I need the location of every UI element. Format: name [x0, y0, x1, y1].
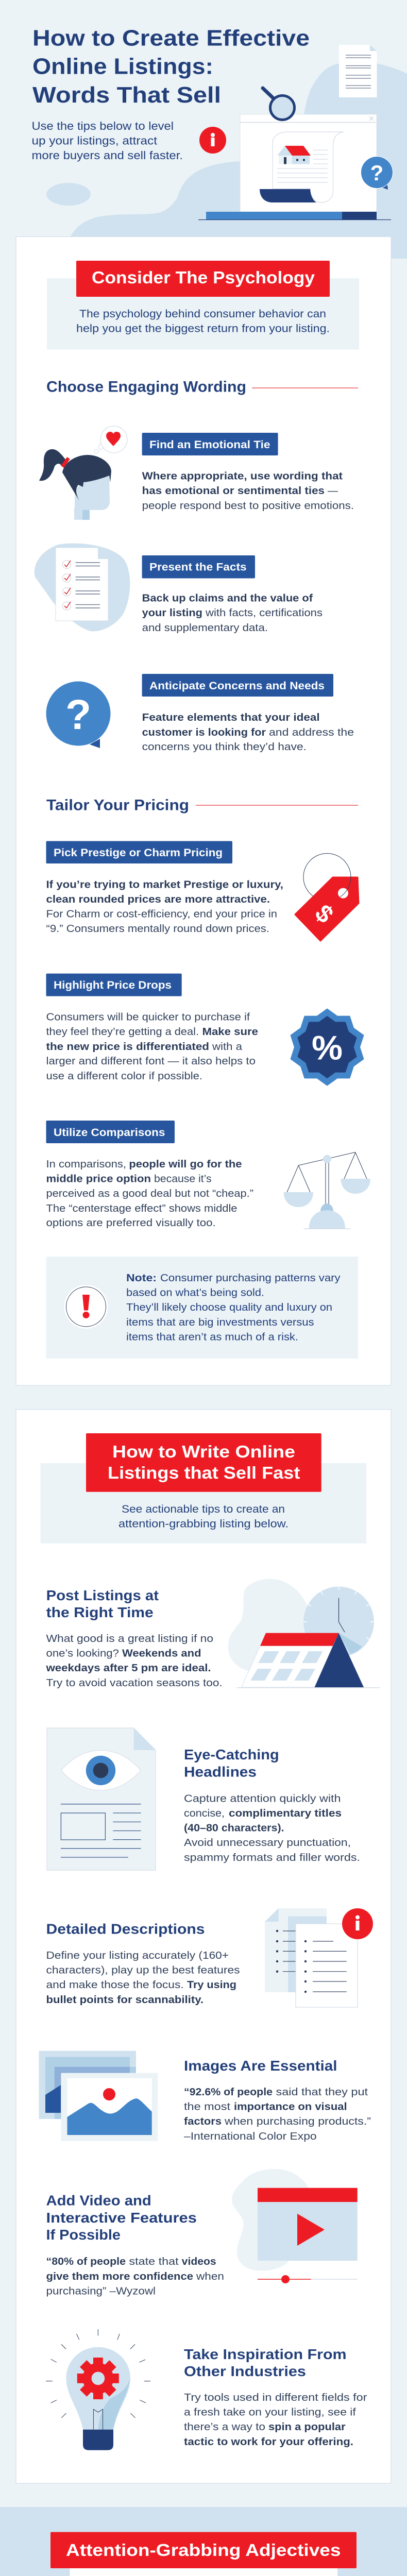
intro text: up your listings, attract — [32, 134, 157, 147]
block: images are essential: said that they put — [276, 2086, 368, 2098]
block: find an emotional tie: people respond best to positive emotions. — [142, 500, 354, 512]
block: add video and interactive features: when — [196, 2270, 224, 2282]
block: highlight price drops — [46, 974, 258, 1082]
icon: exclamation circle — [64, 1285, 108, 1329]
block: add video and interactive features: purchasing” –Wyzowl — [46, 2285, 156, 2297]
icon: stacked bullet documents — [265, 1908, 373, 2007]
heading banner: attention-grabbing adjectives: Attention-Grabbing Adjectives — [66, 2540, 341, 2560]
block: take inspiration from other industries: Try tools used in different fields for — [184, 2392, 367, 2403]
block: take inspiration from other industries: tactic to work for your offering. — [184, 2436, 353, 2448]
block: anticipate concerns and needs — [142, 674, 354, 753]
block: anticipate concerns and needs: concerns you think they’d have. — [142, 741, 307, 753]
heading banner: consider the psychology: Consider The Psychology — [92, 268, 315, 287]
block: highlight price drops: the new price is differentiated — [46, 1041, 209, 1053]
block: detailed descriptions: Try using — [187, 1979, 236, 1991]
block: add video and interactive features: Add Video and — [46, 2193, 151, 2209]
heading: tailor your pricing: Tailor Your Pricing — [46, 796, 189, 814]
block: anticipate concerns and needs: customer is looking for — [142, 726, 266, 738]
intro box: See actionable tips to create an — [122, 1503, 285, 1515]
heading banner: attention-grabbing adjectives — [50, 2532, 357, 2568]
block: eye-catching headlines: complimentary titles — [229, 1807, 342, 1819]
intro text: more buyers and sell faster. — [32, 149, 183, 162]
intro box: attention-grabbing listing below. — [118, 1518, 289, 1530]
title: Online Listings: — [32, 54, 213, 79]
heading banner: how to write online listings — [86, 1433, 321, 1492]
title: How to Create Effective — [32, 26, 310, 51]
section: attention-grabbing adjectives — [0, 2507, 407, 2576]
block: take inspiration from other industries: Take Inspiration From — [184, 2346, 347, 2362]
block: eye-catching headlines — [184, 1747, 360, 1863]
icon: document — [339, 45, 377, 97]
block: highlight price drops: with a — [212, 1041, 243, 1053]
block: detailed descriptions: Define your listing accurately (160+ — [46, 1950, 229, 1961]
block: add video and interactive features: videos — [182, 2256, 216, 2267]
block: find an emotional tie: Where appropriate, use wording that — [142, 470, 343, 482]
block: highlight price drops: Consumers will be quicker to purchase if — [46, 1011, 250, 1023]
block: utilize comparisons — [46, 1121, 253, 1229]
icon: question bubble — [361, 157, 393, 190]
icon: checklist document — [35, 544, 130, 631]
block: utilize comparisons: because it’s — [154, 1173, 212, 1185]
block: present the facts: Present the Facts — [149, 562, 247, 573]
icon: price tag — [295, 853, 359, 941]
block: take inspiration from other industries: a fresh take on your listing, see if — [184, 2406, 356, 2418]
block: pick prestige or charm pricing: “9.” Consumers mentally round down prices. — [46, 923, 269, 935]
icon: video player — [232, 2169, 358, 2283]
block: eye-catching headlines: concise, — [184, 1807, 225, 1819]
block: images are essential: “92.6% of people — [184, 2086, 273, 2098]
block: utilize comparisons: Utilize Comparisons — [54, 1127, 165, 1139]
block: find an emotional tie: Find an Emotional Tie — [149, 439, 270, 451]
icon: balance scale — [284, 1152, 370, 1229]
callout: note: Consumer purchasing patterns vary — [160, 1272, 341, 1284]
block: highlight price drops: they feel they’re getting a deal. — [46, 1026, 199, 1038]
title — [32, 26, 310, 108]
heading banner: consider the psychology — [76, 261, 330, 297]
intro box: help you get the biggest return from your listing. — [76, 323, 330, 335]
icon: magnifying glass — [263, 88, 295, 120]
block: add video and interactive features: Interactive Features — [46, 2210, 197, 2226]
block: post listings at the right time: Weekends and — [122, 1648, 201, 1659]
block: post listings at the right time: Post Listings at — [46, 1587, 159, 1603]
intro box — [41, 1463, 366, 1544]
block: eye-catching headlines: Headlines — [184, 1764, 257, 1780]
block: utilize comparisons: perceived as a good deal but not “cheap.” — [46, 1188, 253, 1199]
block: anticipate concerns and needs: and address the — [269, 726, 354, 738]
block: take inspiration from other industries: spin a popular — [268, 2421, 346, 2433]
block: add video and interactive features — [46, 2193, 224, 2297]
block: pick prestige or charm pricing: clean rounded prices are more attractive. — [46, 893, 270, 905]
block: detailed descriptions: bullet points for scannability. — [46, 1994, 204, 2006]
callout: note: based on what’s being sold. — [126, 1287, 264, 1299]
icon: percent badge — [291, 1009, 363, 1085]
block: pick prestige or charm pricing: For Charm or cost-efficiency, end your price in — [46, 908, 277, 920]
block: utilize comparisons: In comparisons, — [46, 1158, 126, 1170]
title: Words That Sell — [32, 82, 221, 108]
icon: red info circle — [199, 127, 226, 154]
block: find an emotional tie — [142, 433, 354, 512]
block: eye-catching headlines: Avoid unnecessary punctuation, — [184, 1837, 351, 1849]
heading: choose engaging wording: Choose Engaging Wording — [46, 379, 246, 396]
block: highlight price drops: larger and different font — it also helps to — [46, 1055, 256, 1067]
block: take inspiration from other industries — [184, 2346, 367, 2448]
block: images are essential: Images Are Essential — [184, 2058, 337, 2074]
block: images are essential: the most — [184, 2101, 230, 2113]
icon: document with eye — [47, 1728, 156, 1870]
block: find an emotional tie: — — [328, 485, 338, 497]
heading banner: how to write online listings: Listings that Sell Fast — [108, 1463, 300, 1482]
block: eye-catching headlines: (40–80 characters). — [184, 1822, 284, 1834]
callout: note: They’ll likely choose quality and luxury on — [126, 1301, 332, 1313]
block: utilize comparisons: The “centerstage effect” shows middle — [46, 1202, 237, 1214]
block: pick prestige or charm pricing — [46, 841, 283, 935]
block: add video and interactive features: If Possible — [46, 2227, 121, 2243]
block: images are essential — [184, 2058, 371, 2142]
block: images are essential: when purchasing products.” — [224, 2115, 371, 2127]
icon: clock and calendar — [228, 1579, 380, 1688]
block: present the facts: and supplementary data. — [142, 622, 268, 634]
icon: price tag: $ — [310, 900, 338, 928]
block: images are essential: factors — [184, 2115, 222, 2127]
block: present the facts: your listing — [142, 607, 202, 619]
heading banner: how to write online listings: How to Write Online — [112, 1442, 295, 1461]
intro box: The psychology behind consumer behavior can — [79, 308, 326, 320]
block: post listings at the right time: weekdays after 5 pm are ideal. — [45, 1662, 211, 1674]
block: utilize comparisons: options are preferred visually too. — [46, 1217, 216, 1229]
block: take inspiration from other industries: Other Industries — [184, 2363, 306, 2379]
callout: note: items that aren’t as much of a risk. — [126, 1331, 298, 1343]
block: eye-catching headlines: Capture attention quickly with — [184, 1793, 341, 1804]
icon: woman thinking of heart — [39, 426, 127, 520]
icon: base bar — [198, 212, 391, 219]
block: images are essential: importance on visual — [234, 2101, 347, 2113]
block: detailed descriptions: characters), play up the best features — [46, 1964, 240, 1976]
icon: light bulb with gear — [46, 2329, 150, 2450]
block: present the facts: with facts, certifications — [205, 607, 323, 619]
intro box — [70, 2568, 337, 2576]
block: take inspiration from other industries: there’s a way to — [184, 2421, 265, 2433]
block: anticipate concerns and needs: Feature elements that your ideal — [142, 711, 320, 723]
callout: note: Note: — [126, 1272, 157, 1284]
intro text: Use the tips below to level — [32, 120, 174, 132]
icon: percent badge: % — [312, 1028, 343, 1066]
block: find an emotional tie: has emotional or sentimental ties — [142, 485, 325, 497]
intro text — [32, 120, 183, 162]
block: pick prestige or charm pricing: Pick Prestige or Charm Pricing — [54, 847, 223, 859]
icon: question speech bubble — [46, 681, 110, 748]
block: highlight price drops: use a different color if possible. — [46, 1070, 202, 1082]
block: post listings at the right time: Try to avoid vacation seasons too. — [46, 1677, 223, 1689]
block: post listings at the right time — [45, 1587, 223, 1689]
block: post listings at the right time: one’s looking? — [46, 1648, 119, 1659]
block: highlight price drops: Highlight Price Drops — [54, 979, 172, 991]
intro box — [47, 278, 359, 350]
callout: note — [46, 1257, 358, 1359]
block: detailed descriptions — [46, 1921, 240, 2006]
block: add video and interactive features: state that — [129, 2256, 179, 2267]
block: detailed descriptions: Detailed Descriptions — [46, 1921, 205, 1937]
callout: note: items that are big investments versus — [126, 1316, 314, 1328]
header illustration background blobs — [46, 63, 407, 259]
block: post listings at the right time: What good is a great listing if no — [46, 1633, 213, 1645]
block: present the facts — [142, 555, 323, 634]
block: highlight price drops: Make sure — [202, 1026, 258, 1038]
block: post listings at the right time: the Right Time — [46, 1604, 154, 1620]
icon: question speech bubble: ? — [65, 691, 91, 738]
block: add video and interactive features: give them more confidence — [46, 2270, 193, 2282]
block: pick prestige or charm pricing: If you’re trying to market Prestige or luxury, — [46, 879, 283, 891]
panel: consider the psychology — [16, 237, 391, 1385]
block: anticipate concerns and needs: Anticipate Concerns and Needs — [149, 680, 325, 692]
icon: stacked images — [39, 2051, 158, 2141]
block: eye-catching headlines: Eye-Catching — [184, 1747, 279, 1762]
icon: question bubble: ? — [370, 161, 383, 185]
block: eye-catching headlines: spammy formats and filler words. — [184, 1852, 360, 1863]
icon: listing window with scroll — [240, 114, 377, 212]
panel: how to write online listings — [16, 1410, 391, 2483]
block: add video and interactive features: “80% of people — [46, 2256, 126, 2267]
block: present the facts: Back up claims and the value of — [142, 592, 313, 604]
block: images are essential: –International Color Expo — [184, 2130, 317, 2142]
block: utilize comparisons: people will go for the — [129, 1158, 242, 1170]
block: utilize comparisons: middle price option — [46, 1173, 151, 1185]
block: detailed descriptions: and make those the focus. — [46, 1979, 184, 1991]
